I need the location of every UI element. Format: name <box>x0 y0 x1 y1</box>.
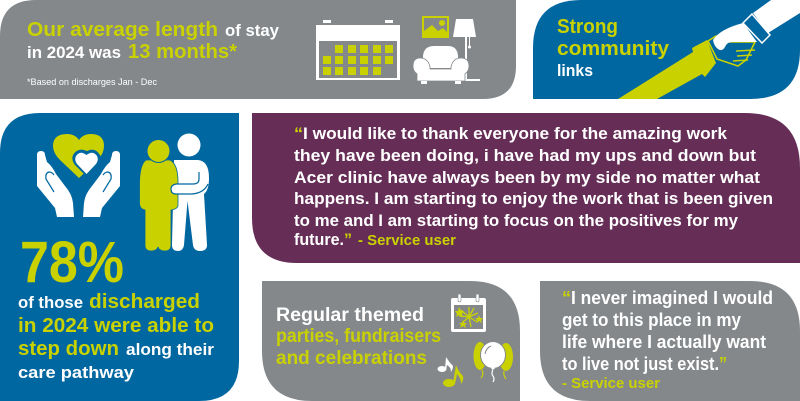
text: regular themed parties <box>276 305 441 369</box>
icon: calendar with fireworks <box>451 294 486 332</box>
quote text: life where I actually want <box>562 332 766 352</box>
big number 78%: 78% <box>20 230 124 295</box>
quote text: - Service user <box>562 375 660 392</box>
icon: hands holding heart <box>37 134 120 217</box>
quote text: happens. I am starting to enjoy the work that is been given <box>294 189 773 208</box>
quote text: to live not just exist. <box>562 354 719 374</box>
icon: music notes <box>438 357 463 387</box>
quote text: I never imagined I would <box>571 288 773 308</box>
quote text <box>294 124 773 249</box>
text: discharged step down: care pathway <box>18 363 135 382</box>
panel: service user quote grey <box>540 281 800 401</box>
heading: average length of stay: in 2024 was <box>27 44 121 62</box>
heading: strong community links: Strong <box>557 16 618 38</box>
text: discharged step down: step down <box>18 338 119 360</box>
panel: length of stay <box>0 0 516 99</box>
text: discharged step down <box>18 291 214 382</box>
quote text: “ <box>294 124 303 143</box>
quote text: “ <box>562 288 571 308</box>
quote text: to me and I am starting to focus on the positives for my <box>294 211 739 230</box>
quote text: they have been doing, i have had my ups and down but <box>294 146 756 165</box>
heading: average length of stay: of stay <box>225 22 280 40</box>
icon: picture frame <box>423 17 448 37</box>
quote text: - Service user <box>358 232 456 249</box>
text: regular themed parties: parties, fundraisers <box>276 326 441 347</box>
icon: balloons <box>474 342 513 382</box>
quote text: get to this place in my <box>562 310 741 330</box>
heading: strong community links: community <box>557 38 670 60</box>
quote text: I would like to thank everyone for the amazing work <box>303 124 728 143</box>
icon: two people <box>140 134 209 251</box>
text: discharged step down: of those <box>18 293 83 312</box>
panel: themed parties <box>262 281 520 401</box>
footnote: *Based on discharges Jan - Dec <box>27 77 157 87</box>
quote text: future. <box>294 230 344 249</box>
panel: service user quote purple <box>252 113 800 263</box>
text: discharged step down: along their <box>126 340 214 359</box>
heading: average length of stay: Our average length <box>27 19 218 41</box>
heading: strong community links: links <box>557 62 593 80</box>
panel: 78% stepped down <box>0 113 239 401</box>
text: discharged step down: discharged <box>89 291 200 313</box>
heading: average length of stay: 13 months* <box>128 41 237 63</box>
text: discharged step down: in 2024 were able to <box>18 315 214 337</box>
text: regular themed parties: and celebrations <box>276 348 427 369</box>
heading: strong community links <box>557 16 670 80</box>
quote text: ” <box>719 354 727 374</box>
quote text <box>562 288 773 392</box>
quote text: Acer clinic have always been by my side no matter what <box>294 168 760 187</box>
panel: community links <box>533 0 800 99</box>
icon: lamp and armchair <box>413 19 480 84</box>
quote text: ” <box>344 230 352 249</box>
text: regular themed parties: Regular themed <box>276 305 424 326</box>
icon: calendar <box>316 20 400 80</box>
heading: average length of stay <box>27 19 280 63</box>
icon: helping hands <box>618 0 800 99</box>
